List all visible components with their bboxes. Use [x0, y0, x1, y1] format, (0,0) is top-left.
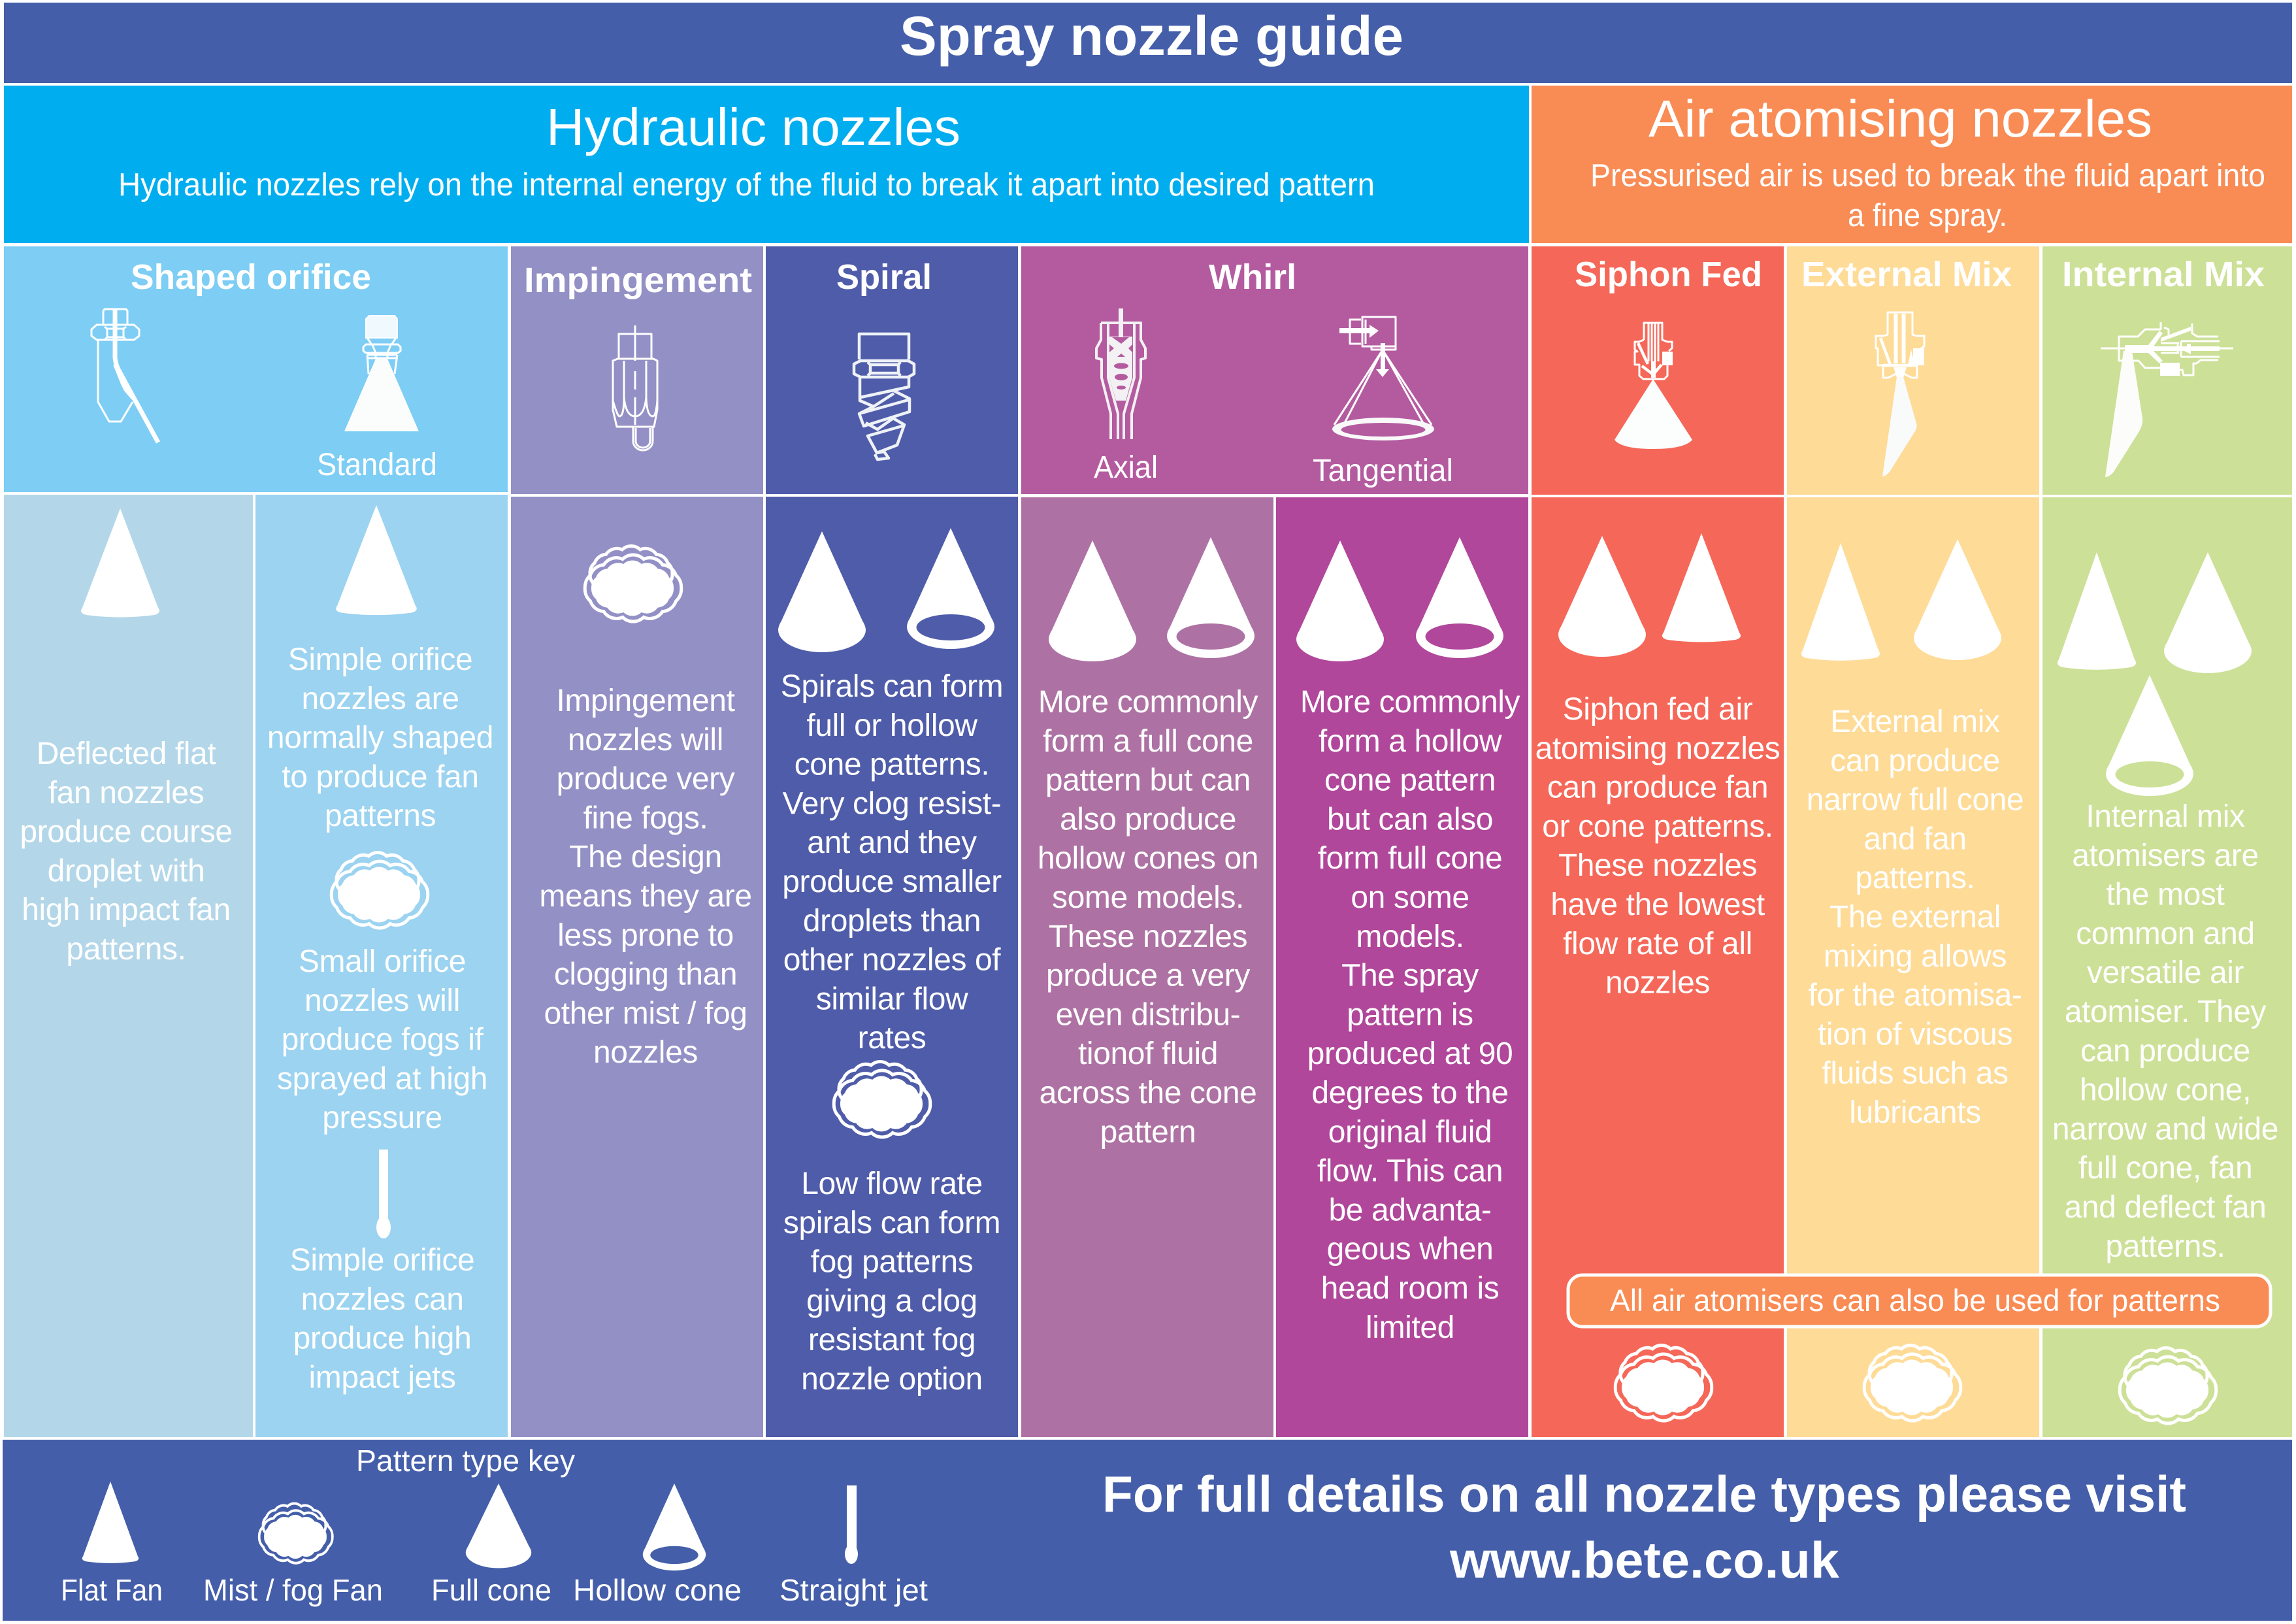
label: axial: Axial	[1094, 450, 1158, 485]
icon: mist	[585, 546, 681, 621]
key label: hollow cone: Hollow cone	[573, 1573, 742, 1607]
icon: tangential nozzle	[1332, 317, 1434, 440]
icon: flat fan	[1801, 543, 1880, 661]
text: tangential: cone pattern	[1324, 763, 1496, 798]
text: siphon: nozzles	[1605, 966, 1710, 1001]
key icon: flat fan	[82, 1482, 139, 1563]
text: axial: hollow cones on	[1038, 841, 1258, 876]
text: deflected: produce course	[20, 815, 233, 850]
text: high impact jets: nozzles can	[301, 1282, 464, 1317]
text: internal: can produce	[2080, 1034, 2250, 1069]
text: axial: pattern but can	[1045, 763, 1251, 798]
text: high impact jets: impact jets	[308, 1360, 456, 1395]
text: internal: common and	[2076, 916, 2255, 951]
panel: internal mix header	[2042, 246, 2292, 495]
heading: impingement: Impingement	[524, 261, 752, 300]
heading: spiral: Spiral	[836, 257, 932, 297]
heading: siphon fed: Siphon Fed	[1575, 255, 1762, 294]
icon: full cone	[1914, 539, 2001, 660]
panel: hydraulic nozzles header: Hydraulic nozzles	[546, 98, 960, 156]
text: simple orifice fan: nozzles are	[301, 682, 459, 716]
text: siphon: flow rate of all	[1563, 927, 1752, 961]
text: small orifice: Small orifice	[299, 944, 466, 979]
text: low flow spirals: fog patterns	[811, 1245, 973, 1280]
icon: mist	[834, 1061, 930, 1137]
text: low flow spirals: nozzle option	[801, 1362, 983, 1397]
text: external: The external	[1829, 900, 2001, 935]
key icon: mist	[259, 1504, 333, 1563]
text: deflected: droplet with	[48, 853, 205, 888]
panel: tangential whirl	[1276, 497, 1528, 1437]
text: axial: More commonly	[1038, 685, 1258, 720]
icon: full cone	[1558, 536, 1646, 657]
panel: internal mix	[2042, 497, 2292, 1437]
heading: shaped orifice: Shaped orifice	[131, 257, 371, 297]
panel: external mix	[1787, 497, 2039, 1437]
icon: straight jet	[376, 1150, 391, 1238]
text: spirals: produce smaller	[782, 865, 1002, 899]
panel: standard orifice	[255, 495, 508, 1437]
panel: spiral	[766, 497, 1018, 1437]
text: internal: the most	[2107, 878, 2224, 912]
panel: external mix header	[1787, 246, 2039, 495]
text: siphon: can produce fan	[1547, 771, 1768, 805]
text: tangential: original fluid	[1328, 1115, 1492, 1150]
text: internal: versatile air	[2087, 955, 2244, 990]
text: tangential: head room is	[1321, 1271, 1499, 1306]
legend: pattern type key	[61, 1444, 928, 1607]
title banner	[4, 3, 2292, 83]
text: tangential: geous when	[1327, 1232, 1493, 1267]
text: spirals: full or hollow	[806, 708, 977, 743]
text: tangential: The spray	[1341, 959, 1479, 993]
icon: hollow cone	[1416, 537, 1503, 658]
text: internal: atomisers are	[2072, 838, 2259, 873]
text: external: tion of viscous	[1818, 1017, 2012, 1052]
text: external: can produce	[1830, 744, 2000, 778]
panel: footer	[3, 1440, 2292, 1621]
icon: full cone	[1049, 540, 1136, 661]
icon: siphon nozzle	[1615, 323, 1692, 449]
icon: spiral nozzle	[854, 334, 914, 459]
icon: hollow cone	[1167, 537, 1255, 658]
icon: mist	[1615, 1345, 1712, 1421]
text: tangential: but can also	[1327, 802, 1493, 837]
text: deflected: patterns.	[66, 932, 186, 967]
key label: flat fan: Flat Fan	[61, 1573, 163, 1607]
text: low flow spirals: Low flow rate	[801, 1167, 983, 1201]
text: external: patterns.	[1855, 861, 1975, 895]
text: impingement: less prone to	[557, 918, 734, 953]
panel: air atomising nozzles header: a fine spray.	[1848, 198, 2007, 233]
icon: mist	[331, 852, 428, 928]
heading: external mix: External Mix	[1801, 255, 2012, 294]
text: impingement: The design	[569, 840, 722, 874]
panel: spiral header	[766, 246, 1018, 494]
text: external: External mix	[1830, 704, 2000, 739]
icon: full cone	[778, 531, 866, 652]
text: siphon: or cone patterns.	[1542, 809, 1773, 844]
text: tangential: on some	[1351, 880, 1469, 915]
panel: hydraulic nozzles header: Hydraulic nozzles rely on the internal energy of the fluid to break it apart into desired pattern	[118, 167, 1375, 203]
heading: whirl: Whirl	[1209, 257, 1296, 297]
text: tangential: flow. This can	[1317, 1154, 1503, 1189]
text: low flow spirals: resistant fog	[808, 1323, 976, 1357]
text: external: mixing allows	[1824, 939, 2007, 974]
text: internal: Internal mix	[2086, 799, 2245, 834]
text: small orifice: pressure	[322, 1101, 442, 1135]
text: internal: atomiser. They	[2065, 995, 2267, 1029]
text: spirals: droplets than	[803, 904, 981, 938]
text: external: and fan	[1863, 821, 1967, 856]
text: external: for the atomisa-	[1808, 978, 2022, 1013]
key label: full cone: Full cone	[431, 1573, 551, 1607]
icon: mist	[1864, 1345, 1961, 1421]
icon: mist	[2120, 1348, 2216, 1423]
icon: external mix nozzle	[1876, 312, 1924, 476]
text: impingement: produce very	[557, 762, 735, 797]
text: simple orifice fan: patterns	[325, 799, 436, 833]
text: tangential: pattern is	[1347, 997, 1473, 1032]
title banner: Spray nozzle guide	[900, 5, 1403, 67]
text: spirals: ant and they	[807, 825, 977, 860]
text: small orifice: produce fogs if	[282, 1023, 484, 1057]
text: tangential: More commonly	[1300, 685, 1520, 720]
call to action: website: For full details on all nozzle types please visit	[1102, 1465, 2186, 1523]
text: spirals: cone patterns.	[795, 748, 989, 782]
text: axial: across the cone	[1040, 1076, 1256, 1110]
text: internal: full cone, fan	[2078, 1151, 2252, 1185]
panel: axial whirl	[1021, 497, 1273, 1437]
panel: impingement	[511, 497, 763, 1437]
icon: deflected nozzle	[91, 308, 158, 442]
panel: shaped orifice header	[4, 246, 508, 492]
text: spirals: rates	[858, 1021, 926, 1055]
text: siphon: Siphon fed air	[1563, 692, 1753, 727]
text: spirals: Very clog resist-	[783, 786, 1001, 821]
call to action: website: www.bete.co.uk	[1449, 1531, 1840, 1589]
text: external: narrow full cone	[1807, 783, 2024, 818]
icon: axial nozzle	[1096, 308, 1145, 439]
icon: flat fan	[1662, 533, 1741, 642]
text: small orifice: sprayed at high	[277, 1061, 487, 1096]
text: small orifice: nozzles will	[304, 984, 460, 1018]
text: external: fluids such as	[1822, 1056, 2009, 1091]
text: high impact jets: produce high	[293, 1321, 471, 1356]
text: axial: pattern	[1100, 1115, 1196, 1150]
text: impingement: nozzles will	[568, 723, 723, 757]
text: tangential: models.	[1356, 920, 1464, 954]
call to action: website	[1102, 1465, 2186, 1589]
key icon: full cone	[466, 1483, 531, 1568]
icon: impingement nozzle	[613, 325, 657, 450]
icon: internal mix nozzle	[2101, 322, 2233, 477]
key label: mist: Mist / fog Fan	[203, 1573, 383, 1607]
text: internal: narrow and wide	[2052, 1112, 2278, 1146]
text: impingement: fine fogs.	[583, 801, 708, 835]
text: deflected: fan nozzles	[48, 776, 204, 810]
text: high impact jets: Simple orifice	[290, 1243, 474, 1278]
text: low flow spirals: spirals can form	[783, 1206, 1000, 1240]
text: tangential: produced at 90	[1307, 1036, 1513, 1071]
text: impingement: means they are	[539, 879, 752, 914]
text: simple orifice fan: to produce fan	[282, 759, 479, 794]
label: standard: Standard	[317, 448, 437, 482]
icon: hollow cone	[2106, 675, 2193, 796]
text: spirals: Spirals can form	[781, 669, 1003, 704]
heading: internal mix: Internal Mix	[2062, 255, 2265, 294]
text: tangential: be advanta-	[1328, 1193, 1492, 1227]
text: deflected: high impact fan	[22, 893, 231, 927]
text: axial: some models.	[1052, 880, 1244, 915]
panel: siphon fed	[1532, 497, 1784, 1437]
text: tangential: limited	[1366, 1310, 1454, 1345]
text: low flow spirals: giving a clog	[806, 1284, 977, 1318]
icon: flat fan	[81, 508, 159, 617]
panel: air atomising nozzles header: Air atomising nozzles	[1648, 90, 2152, 148]
text: spirals: other nozzles of	[783, 943, 1001, 978]
icon: full cone	[2164, 552, 2252, 673]
panel: air atomising nozzles header: Pressurised air is used to break the fluid apart into	[1590, 158, 2265, 193]
text: axial: even distribu-	[1056, 997, 1240, 1032]
icon: hollow cone	[907, 528, 994, 649]
icon: flat fan	[336, 505, 417, 615]
text: tangential: form full cone	[1318, 841, 1502, 876]
icon: standard flat fan nozzle	[344, 316, 419, 431]
label: tangential: Tangential	[1313, 454, 1453, 488]
text: impingement: Impingement	[556, 684, 735, 718]
text: tangential: degrees to the	[1311, 1076, 1509, 1110]
panel: air atomising nozzles header	[1532, 86, 2292, 243]
panel: hydraulic nozzles header	[4, 86, 1529, 243]
text: impingement: other mist / fog	[544, 996, 747, 1031]
legend: pattern type key: Pattern type key	[356, 1444, 575, 1478]
text: siphon: These nozzles	[1558, 848, 1757, 883]
text: axial: also produce	[1060, 802, 1236, 837]
text: impingement: clogging than	[554, 957, 737, 992]
text: simple orifice fan: Simple orifice	[288, 642, 472, 677]
text: internal: patterns.	[2105, 1229, 2225, 1264]
text: internal: and deflect fan	[2065, 1190, 2266, 1225]
key label: straight jet: Straight jet	[779, 1573, 928, 1607]
icon: flat fan	[2058, 552, 2136, 670]
text: internal: hollow cone,	[2080, 1073, 2251, 1108]
text: siphon: have the lowest	[1550, 887, 1765, 922]
text: axial: produce a very	[1046, 959, 1250, 993]
icon: full cone	[1296, 540, 1384, 661]
text: siphon: atomising nozzles	[1535, 731, 1780, 766]
text: axial: tionof fluid	[1078, 1036, 1218, 1071]
panel: deflected flat fan	[4, 495, 253, 1437]
callout: all air atomisers	[1568, 1275, 2271, 1327]
panel: impingement header	[511, 246, 763, 494]
text: axial: These nozzles	[1049, 920, 1247, 954]
key icon: straight jet	[845, 1485, 858, 1564]
panel: whirl header	[1021, 246, 1528, 494]
panel: siphon fed header	[1532, 246, 1784, 495]
text: spirals: similar flow	[816, 982, 968, 1016]
key icon: hollow cone	[643, 1483, 706, 1570]
callout: all air atomisers: All air atomisers can also be used for patterns	[1610, 1283, 2220, 1317]
text: impingement: nozzles	[593, 1035, 698, 1070]
text: external: lubricants	[1849, 1095, 1981, 1130]
text: simple orifice fan: normally shaped	[267, 721, 493, 755]
text: deflected: Deflected flat	[37, 737, 216, 771]
text: tangential: form a hollow	[1319, 724, 1502, 759]
text: axial: form a full cone	[1043, 724, 1253, 759]
